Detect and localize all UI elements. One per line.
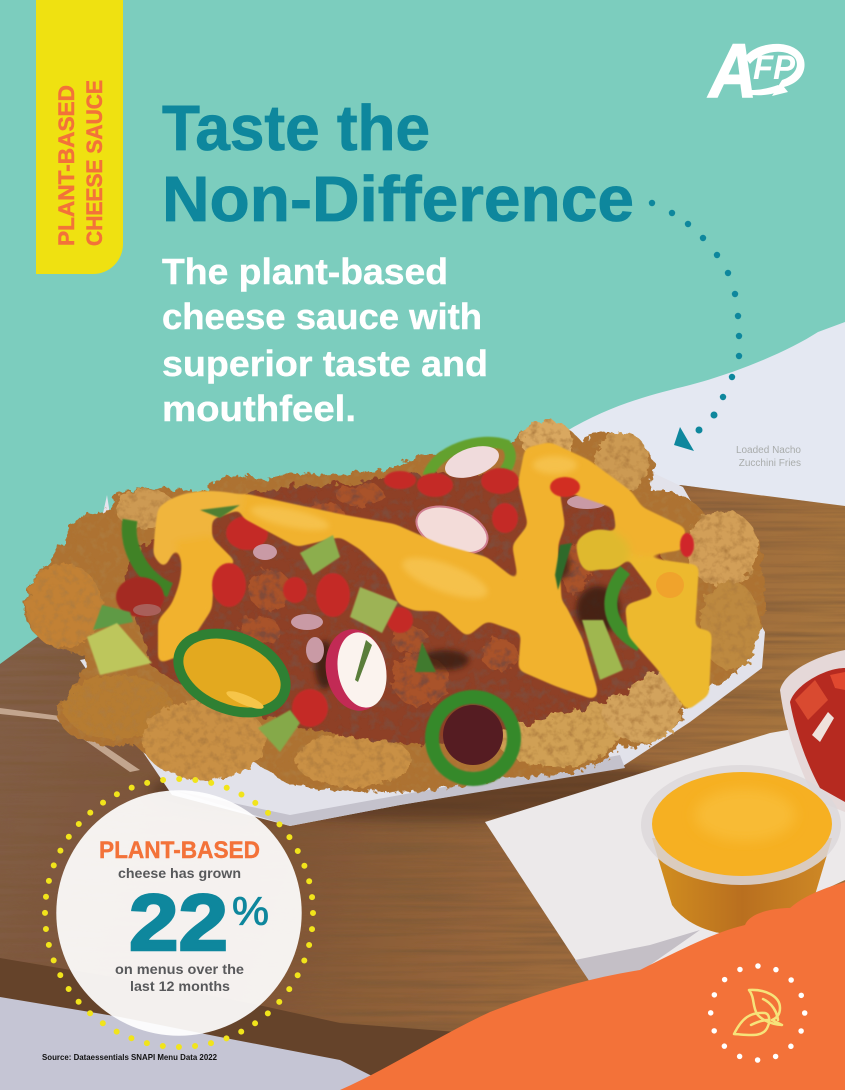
- photo: napkin: [485, 720, 845, 982]
- crust silhouette: [24, 423, 764, 792]
- source: Source: Dataessentials SNAPI Menu Data 2022: [42, 1052, 217, 1062]
- caption: Zucchini Fries: [739, 458, 801, 469]
- shadow: [150, 760, 730, 820]
- chili chunks: [240, 483, 589, 706]
- dotted ring: [45, 779, 313, 1047]
- caption: Loaded Nacho: [736, 445, 801, 456]
- board front face: [0, 958, 560, 1090]
- chili base: [125, 474, 680, 745]
- logo: AFP: [707, 29, 805, 114]
- stat number: 22: [129, 878, 228, 967]
- tomato and herbs over sauce: [93, 477, 694, 672]
- subtitle: mouthfeel.: [162, 388, 356, 429]
- orange corner shape: [340, 882, 845, 1090]
- cheese sauce: [153, 442, 712, 711]
- logo: AFP: A: [707, 29, 757, 114]
- backdrop: pale wall torn shape: [560, 322, 845, 510]
- jalapeno centre dark: [443, 705, 503, 765]
- percent sign: %: [232, 890, 269, 934]
- subtitle: superior taste and: [162, 343, 488, 384]
- napkin shade: [575, 930, 700, 982]
- paper tray: [80, 470, 765, 826]
- tomato pieces under sauce: [116, 468, 519, 727]
- yellow tab: [36, 0, 123, 274]
- photo: nacho zucchini fries tray: [24, 420, 765, 826]
- arrow: dotted curve: [649, 200, 742, 451]
- board seam: [0, 708, 140, 772]
- stat line: cheese has grown: [118, 865, 241, 881]
- title: Non-Difference: [162, 163, 634, 235]
- jalapeno rings behind sauce: [129, 442, 640, 779]
- jalapeno ring with sauce: [167, 619, 297, 727]
- caption: [736, 445, 801, 469]
- title: [162, 92, 634, 235]
- wood surface: [0, 485, 845, 1090]
- left tray spike: [100, 495, 114, 540]
- photo: sauce cup: [641, 765, 841, 935]
- radish in top jalapeno: [441, 440, 503, 484]
- stat caption: [115, 961, 244, 994]
- icon: leaves in dotted ring: [711, 966, 805, 1060]
- onion pieces: [133, 495, 607, 663]
- tab text: PLANT-BASED: [54, 85, 79, 246]
- stat caption: last 12 months: [130, 978, 230, 994]
- photo: salsa cup: [780, 650, 845, 812]
- title: Taste the: [162, 92, 430, 164]
- photo: wooden board and marble: [0, 485, 845, 1090]
- tab text: CHEESE SAUCE: [82, 80, 107, 246]
- subtitle: [162, 251, 488, 429]
- stat caption: on menus over the: [115, 961, 244, 977]
- crust pieces: [26, 420, 760, 787]
- radish slice front: [319, 624, 393, 716]
- logo: AFP: FP: [753, 49, 795, 87]
- sauce highlights: [249, 456, 577, 607]
- radish slice upper: [410, 498, 494, 562]
- subtitle: The plant-based: [162, 251, 448, 292]
- tab text: [54, 80, 107, 246]
- avocado cubes: [87, 535, 623, 752]
- tray lower strip shade: [172, 755, 625, 826]
- stat circle: [45, 779, 313, 1047]
- marble: [0, 997, 400, 1090]
- subtitle: cheese sauce with: [162, 296, 482, 337]
- sauce hole: [656, 572, 684, 598]
- dark shadows between toppings: [315, 551, 620, 689]
- stat heading: PLANT-BASED: [99, 837, 260, 864]
